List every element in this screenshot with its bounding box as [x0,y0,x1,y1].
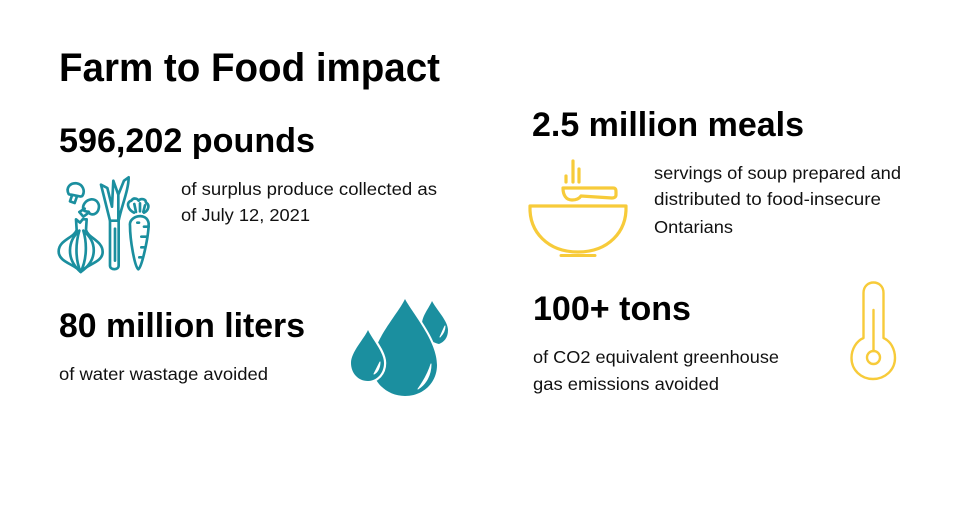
heading: 596,202 pounds: 596,202 pounds [59,122,315,160]
panel: emissions [533,282,895,394]
icon: vegetables [59,177,149,272]
description: surplus produce: of July 12, 2021 [181,205,310,225]
icon: water drops [351,299,448,396]
description: servings of soup: servings of soup prepared and [654,163,901,183]
description: greenhouse gas: gas emissions avoided [533,374,719,394]
panel: water [59,299,448,396]
heading: 80 million liters: 80 million liters [59,307,305,345]
description: servings of soup [654,163,901,237]
title: Farm to Food impact [59,46,440,90]
description: surplus produce: of surplus produce collected as [181,179,437,199]
icon: thermometer [852,282,895,379]
description: greenhouse gas [533,347,779,394]
panel: meals [530,106,901,256]
description: water wastage: of water wastage avoided [59,364,268,384]
heading: 2.5 million meals: 2.5 million meals [532,106,804,144]
description: greenhouse gas: of CO2 equivalent greenhouse [533,347,779,367]
description: servings of soup: Ontarians [654,217,733,237]
description: servings of soup: distributed to food-insecure [654,189,881,209]
description: surplus produce [181,179,437,225]
panel: produce collected [59,122,437,272]
heading: 100+ tons: 100+ tons [533,290,691,328]
icon: soup bowl [530,161,626,256]
